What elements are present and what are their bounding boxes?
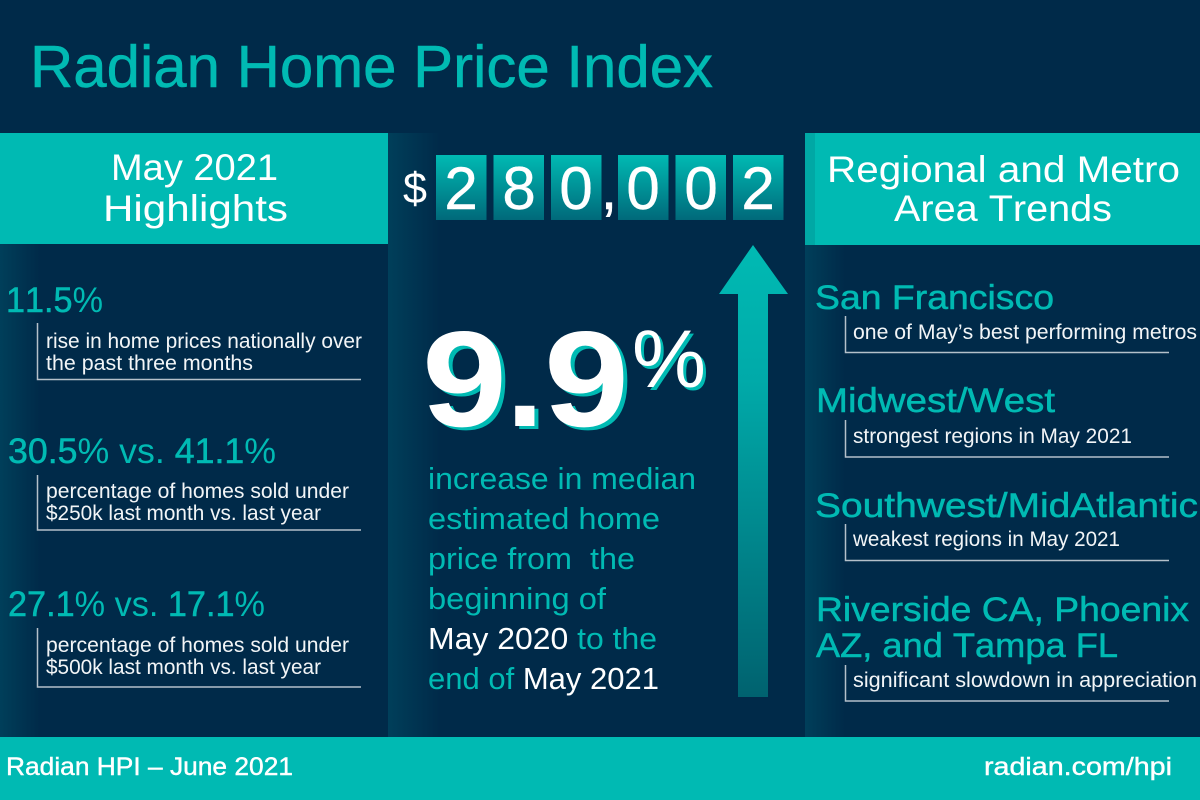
stat: 11.5%	[6, 281, 362, 380]
big stat: 9.9%: 9	[422, 303, 507, 455]
trend: Riverside, Phoenix, Tampa: Riverside CA, Phoenix	[816, 591, 1189, 629]
panel: highlights	[0, 133, 388, 738]
trends header	[805, 133, 1200, 245]
big stat: 9.9%: .	[506, 303, 544, 455]
price counter: 0	[559, 155, 593, 222]
big stat: 9.9%	[422, 303, 709, 458]
price counter: 8	[502, 155, 536, 222]
trend: Southwest/MidAtlantic: weakest regions in May 2021	[852, 528, 1120, 551]
trend: San Francisco: one of May’s best performing metros	[853, 321, 1197, 344]
centre description: end of May 2021	[428, 661, 659, 696]
price counter: 2	[741, 155, 775, 222]
price counter: 2	[444, 155, 478, 222]
trend: Southwest/MidAtlantic: Southwest/MidAtlantic	[815, 487, 1198, 525]
highlights header: May 2021	[111, 147, 278, 188]
trend: Midwest/West: strongest regions in May 2021	[853, 425, 1132, 448]
trends header: Regional and Metro	[827, 149, 1180, 190]
trend: Riverside, Phoenix, Tampa: AZ, and Tampa FL	[816, 627, 1118, 665]
trend: Midwest/West	[816, 382, 1169, 457]
stat: 11.5%: the past three months	[46, 352, 253, 375]
stat: 30.5% vs. 41.1%: 30.5% vs. 41.1%	[8, 432, 276, 471]
big stat: 9.9%: %	[632, 314, 706, 405]
centre description: beginning of	[428, 581, 606, 616]
big stat: 9.9%: .	[510, 306, 548, 458]
trend: Riverside, Phoenix, Tampa: significant slowdown in appreciation	[853, 669, 1197, 692]
big stat: 9.9%: 9	[548, 306, 633, 458]
arrow: up	[719, 245, 788, 697]
stat: 30.5% vs. 41.1%: $250k last month vs. last year	[46, 502, 321, 525]
price counter: ,	[601, 155, 617, 222]
footer: radian.com/hpi	[984, 753, 1172, 781]
stat: 27.1% vs. 17.1%	[8, 585, 361, 687]
centre description: estimated home	[428, 501, 660, 536]
footer: Radian HPI – June 2021	[6, 753, 293, 781]
title: Radian Home Price Index	[30, 34, 713, 100]
stat: 27.1% vs. 17.1%: $500k last month vs. last year	[46, 656, 321, 679]
big stat: 9.9%: 9	[544, 303, 629, 455]
trend: Riverside, Phoenix, Tampa	[816, 591, 1197, 701]
trend: San Francisco: San Francisco	[815, 279, 1054, 317]
stat: 11.5%: 11.5%	[6, 281, 103, 320]
panel: regional trends	[805, 133, 1200, 738]
trend: Midwest/West: Midwest/West	[816, 382, 1056, 420]
price counter: $	[403, 164, 427, 213]
price counter: 0	[684, 155, 718, 222]
trends header: Area Trends	[894, 188, 1112, 229]
centre description: increase in median	[428, 461, 696, 496]
stat: 11.5%: rise in home prices nationally over	[46, 330, 362, 353]
price counter	[403, 155, 784, 222]
centre description	[428, 461, 696, 696]
centre description: price from the	[428, 541, 635, 576]
price counter: 0	[626, 155, 660, 222]
trend: Southwest/MidAtlantic	[815, 487, 1198, 560]
footer	[0, 737, 1200, 800]
big stat: 9.9%: %	[635, 317, 709, 408]
panel: centre background strip	[388, 133, 440, 738]
centre description: May 2020 to the	[428, 621, 657, 656]
stat: 27.1% vs. 17.1%: 27.1% vs. 17.1%	[8, 585, 265, 624]
highlights header	[0, 133, 388, 244]
stat: 27.1% vs. 17.1%: percentage of homes sold under	[46, 634, 349, 657]
big stat: 9.9%: 9	[426, 306, 511, 458]
trend: San Francisco	[815, 279, 1197, 352]
highlights header: Highlights	[103, 188, 288, 229]
stat: 30.5% vs. 41.1%	[8, 432, 361, 530]
stat: 30.5% vs. 41.1%: percentage of homes sold under	[46, 480, 349, 503]
